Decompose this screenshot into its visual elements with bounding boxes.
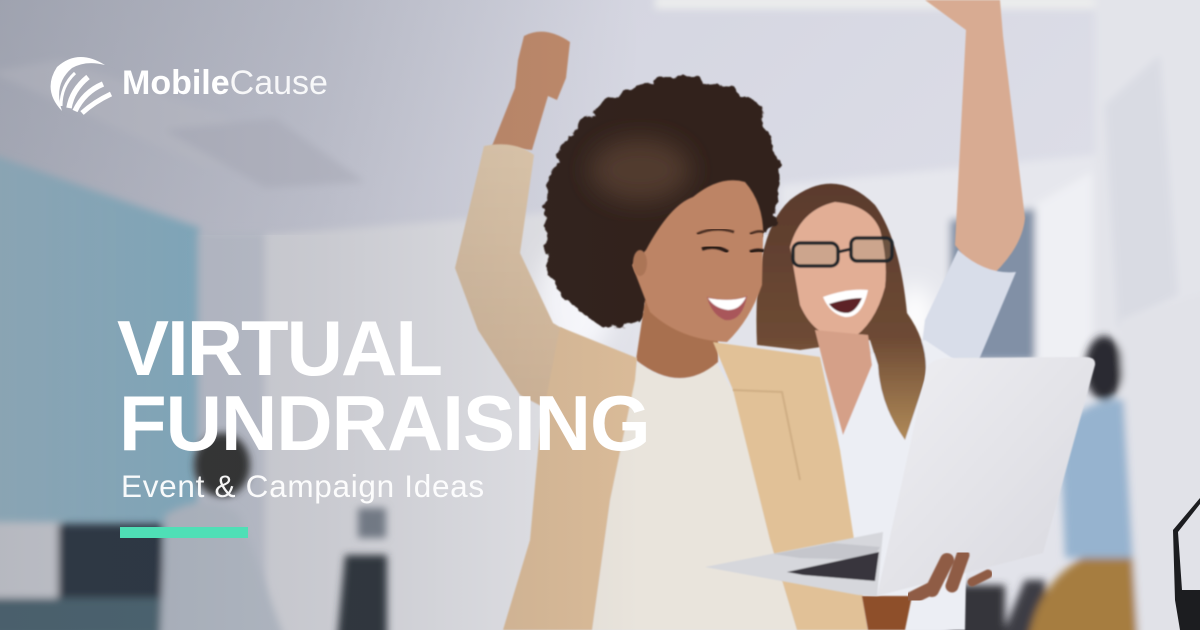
blazer sleeve <box>455 144 590 420</box>
logo: MobileCause <box>50 57 328 115</box>
hair highlight <box>590 138 690 202</box>
icon: striped globe <box>50 57 112 115</box>
face <box>632 180 763 342</box>
right-edge equipment <box>1173 498 1200 630</box>
neck <box>815 330 872 435</box>
neck <box>636 300 718 378</box>
face <box>790 202 886 340</box>
second woman <box>756 0 1025 630</box>
laptop <box>705 357 1095 596</box>
title line 1: VIRTUAL <box>117 304 441 392</box>
hair <box>545 79 779 328</box>
bright window glow behind the women <box>537 240 933 360</box>
white top <box>592 362 797 630</box>
smile <box>707 296 747 320</box>
ear <box>633 250 647 276</box>
shirt <box>835 340 970 630</box>
dark wash on the text side <box>0 0 640 630</box>
open mouth <box>823 290 868 317</box>
raised forearm and fist <box>492 32 570 150</box>
lapel shadow <box>733 390 800 480</box>
hair <box>756 184 926 440</box>
glasses <box>793 243 838 266</box>
accent bar <box>120 527 248 538</box>
blazer right panel <box>713 342 868 630</box>
cuff at wrist <box>862 596 912 630</box>
eyes <box>702 247 764 252</box>
hand fingers over laptop <box>912 555 988 598</box>
eyebrows <box>697 229 764 234</box>
title <box>117 304 650 467</box>
blazer left panel <box>503 327 637 630</box>
logo wordmark: MobileCause <box>122 64 328 102</box>
title line 2: FUNDRAISING <box>119 379 650 467</box>
raised arm <box>925 0 1025 282</box>
first woman <box>455 32 912 630</box>
subtitle: Event & Campaign Ideas <box>121 468 485 504</box>
blurred desk and colleagues <box>0 290 1200 630</box>
sleeve <box>920 250 1016 362</box>
